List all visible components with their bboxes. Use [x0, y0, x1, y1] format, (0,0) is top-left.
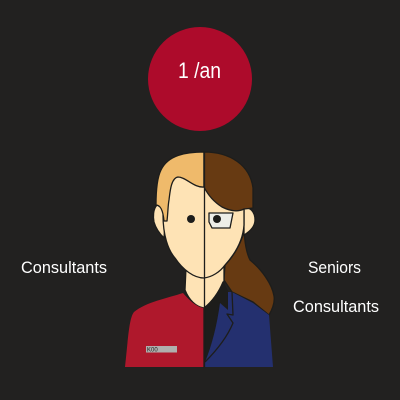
figure: half consultant, half senior consultant	[125, 152, 274, 367]
frequency circle: 1 /an	[178, 58, 221, 83]
right pupil	[213, 215, 221, 223]
neck	[185, 262, 224, 308]
right eye glass	[209, 213, 233, 228]
brown hair	[204, 152, 253, 211]
label: consultants: Consultants	[21, 259, 107, 277]
black shirt	[204, 282, 228, 367]
red shirt	[125, 293, 204, 367]
right ear	[244, 208, 255, 235]
label: seniors consultants: Consultants	[293, 298, 379, 316]
left ear	[153, 205, 166, 238]
label: seniors consultants: Seniors	[308, 259, 361, 277]
frequency circle	[148, 27, 252, 131]
long hair tail	[224, 232, 274, 315]
label: seniors consultants	[293, 259, 379, 316]
blue jacket	[204, 292, 273, 367]
center divider	[204, 152, 206, 367]
blond hair	[156, 152, 204, 221]
face	[163, 165, 244, 278]
name badge: K00	[147, 348, 158, 354]
jacket lapel	[205, 292, 233, 362]
left pupil	[187, 215, 195, 223]
name badge	[146, 346, 177, 354]
